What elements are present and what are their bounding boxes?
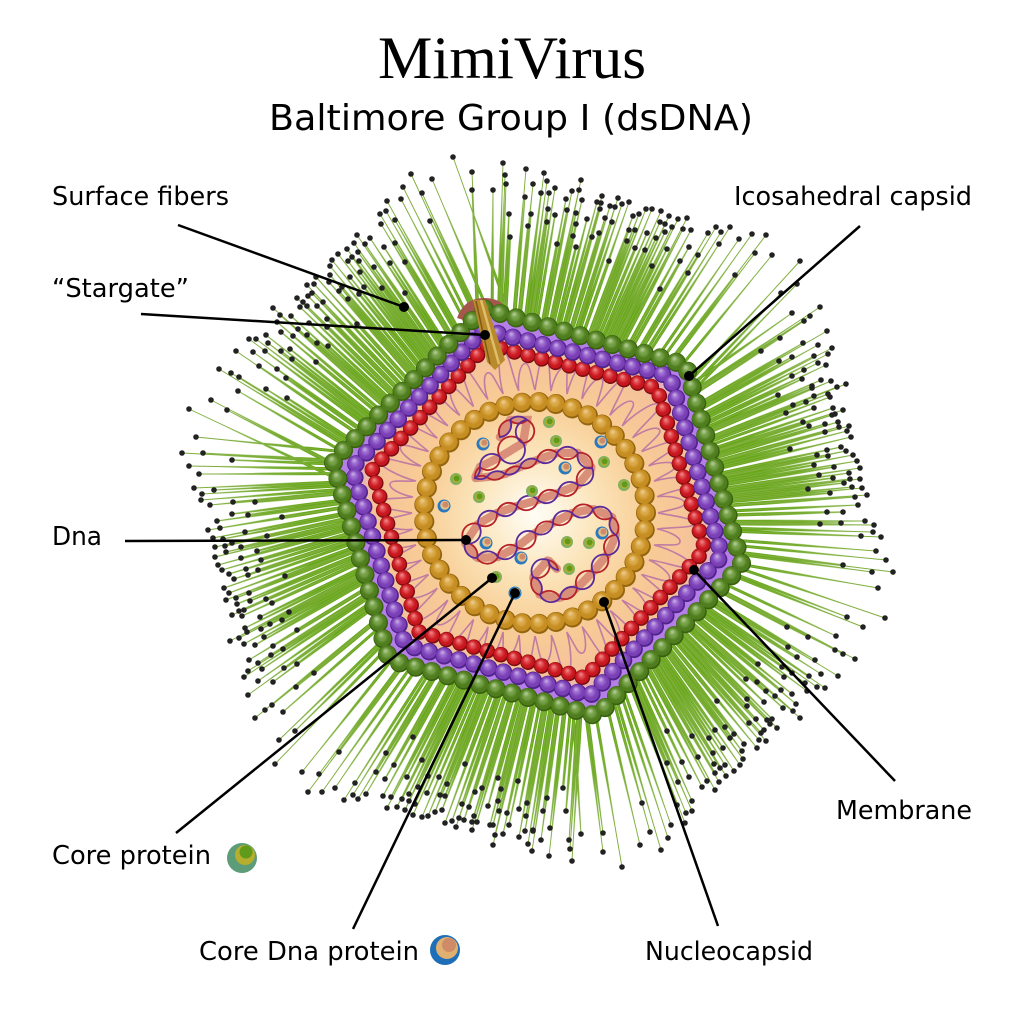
membrane red bead ring (370, 342, 705, 678)
label: surface fibers (52, 182, 409, 312)
icon: core dna protein (430, 935, 460, 965)
core proteins (450, 416, 630, 583)
dna double helix (462, 416, 619, 602)
capsid purple bead ring (350, 327, 722, 696)
core dna proteins (438, 436, 608, 600)
label: membrane (689, 565, 972, 826)
label: membrane: Membrane (836, 796, 972, 826)
title: MimiVirus (378, 25, 646, 91)
label: nucleocapsid: Nucleocapsid (645, 937, 813, 967)
membrane folds (382, 354, 694, 666)
capsid green bead ring (331, 305, 742, 716)
label: dna (52, 522, 471, 552)
nucleocapsid bead ring (422, 398, 646, 624)
subtitle: Baltimore Group I (dsDNA) (269, 98, 753, 139)
label: core protein: Core protein (52, 841, 211, 871)
label: nucleocapsid (599, 597, 813, 967)
label: surface fibers: Surface fibers (52, 182, 229, 212)
label: stargate (52, 274, 490, 340)
stargate stalk (473, 300, 505, 370)
label: core dna protein (199, 588, 520, 967)
icon: core protein (227, 843, 257, 873)
label: stargate: “Stargate” (52, 274, 189, 304)
label: icosahedral capsid: Icosahedral capsid (734, 182, 972, 212)
surface fibers (182, 157, 893, 867)
label: dna: Dna (52, 522, 102, 552)
label: core protein (52, 573, 497, 871)
label: icosahedral capsid (684, 182, 972, 381)
capsid interior (333, 309, 742, 716)
label: core dna protein: Core Dna protein (199, 937, 419, 967)
stargate cap (457, 298, 503, 322)
